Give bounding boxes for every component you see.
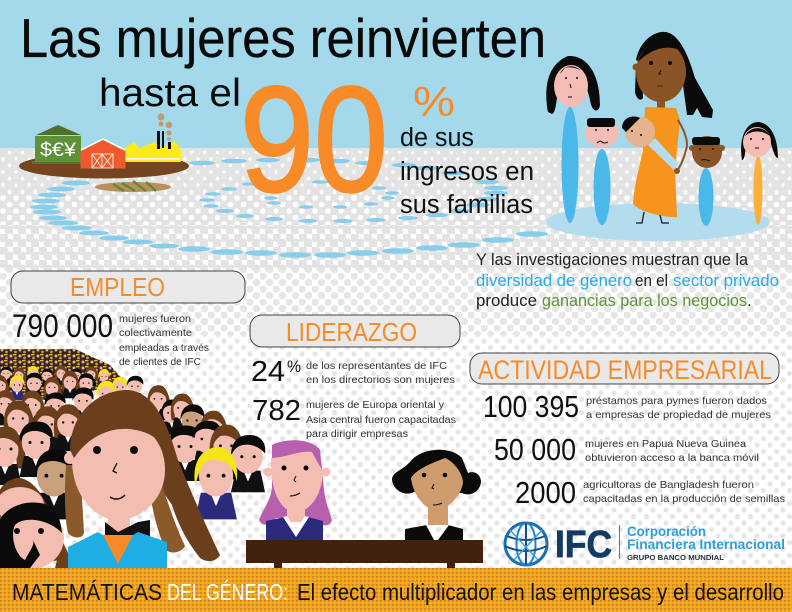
stat description — [306, 399, 456, 440]
heading pill: EMPLEO — [70, 272, 165, 302]
stat description: préstamos para pymes fueron dados — [586, 395, 767, 407]
stat description — [119, 313, 209, 368]
heading pill — [250, 315, 460, 347]
stat description: en los directorios son mujeres — [306, 374, 455, 386]
stat description: para dirigir empresas — [306, 428, 408, 440]
stat description: de los representantes de IFC — [306, 360, 447, 372]
subtitle: de sus ingresos en sus familias — [400, 124, 534, 219]
organisation name — [627, 524, 785, 562]
yellow factory — [123, 114, 181, 162]
illustration: crowd of women — [0, 349, 483, 570]
woman in blue dress — [546, 56, 600, 223]
statement: gender diversity: sector privado — [673, 271, 779, 290]
stat: 782: 782 — [252, 395, 301, 427]
stat description: obtuvieron acceso a la banca móvil — [585, 452, 759, 464]
heading pill — [11, 271, 245, 303]
panel: LIDERAZGO — [250, 315, 460, 440]
statement: gender diversity — [476, 250, 779, 310]
statement: gender diversity: Y las investigaciones muestran que la — [476, 250, 749, 269]
statement: gender diversity: diversidad de género — [476, 271, 632, 290]
background: blue sky — [0, 0, 792, 148]
heading pill: LIDERAZGO — [286, 317, 417, 347]
distant crowd — [0, 349, 125, 400]
stat description: mujeres de Europa oriental y — [306, 399, 445, 411]
stat description: colectivamente — [119, 327, 192, 339]
man with black hair and beard, foreground left — [0, 502, 75, 570]
woman with long brown hair, large foreground — [64, 390, 220, 568]
pink-haired woman — [259, 440, 332, 540]
banner text: DEL GÉNERO: — [167, 579, 288, 605]
globe icon — [505, 523, 547, 565]
stat: 100 395: 100 395 — [483, 389, 579, 424]
panel: EMPLEO — [11, 271, 245, 368]
organisation name: Financiera Internacional — [627, 537, 785, 552]
icon: farm, bank and factory island — [19, 114, 189, 192]
stat description — [306, 360, 455, 386]
organisation name: Corporación — [627, 524, 706, 539]
red barn — [81, 139, 125, 168]
boy with dark skin — [689, 136, 725, 226]
subtitle: de sus ingresos en sus familias: sus familias — [400, 191, 533, 219]
statement: gender diversity: . — [747, 291, 752, 310]
crop field — [95, 181, 171, 192]
mother in orange dress with baby — [622, 32, 713, 223]
stat description: de clientes de IFC — [119, 356, 201, 368]
stat: 50 000: 50 000 — [494, 432, 576, 467]
stat: 24 %: % — [287, 357, 301, 376]
stat description: Asia central fueron capacitadas — [306, 414, 456, 426]
stat: 2000: 2000 — [515, 475, 576, 510]
subtitle: de sus ingresos en sus familias: de sus — [400, 124, 474, 152]
stat description: a empresas de propiedad de mujeres — [586, 409, 771, 421]
footer banner — [0, 568, 792, 612]
organisation name: GRUPO BANCO MUNDIAL — [627, 555, 725, 562]
stat description: empleadas a través — [119, 342, 209, 354]
stat: 790 000: 790 000 — [12, 308, 113, 344]
green bank with currency: $€¥ — [40, 140, 76, 161]
banner text: MATEMÁTICAS — [12, 579, 162, 605]
stat description: mujeres fueron — [119, 313, 191, 325]
statement: gender diversity: produce — [476, 291, 537, 310]
stat description: capacitadas en la producción de semillas — [583, 493, 785, 505]
wooden desk — [246, 540, 483, 569]
girl in orange — [741, 122, 778, 225]
percent sign: % — [413, 78, 455, 125]
pool shadow — [546, 203, 770, 241]
stat: 24 %: 24 — [251, 356, 285, 388]
statement: gender diversity: ganancias para los negocios — [542, 291, 747, 310]
stat description: agricultoras de Bangladesh fueron — [583, 479, 754, 491]
title: Las mujeres reinvierten — [20, 7, 546, 69]
subtitle: de sus ingresos en sus familias: ingresos en — [400, 158, 534, 186]
statement: gender diversity: en el — [635, 271, 668, 290]
woman with black flipped hair — [392, 450, 481, 540]
dark soil island — [19, 154, 189, 178]
stat description — [585, 438, 759, 464]
subtitle: hasta el: hasta el — [99, 72, 241, 115]
big number 90: 90 — [240, 55, 388, 223]
panel: ACTIVIDAD EMPRESARIAL — [470, 353, 785, 510]
crowd rows — [0, 366, 265, 519]
stat description: mujeres en Papua Nueva Guinea — [585, 438, 746, 450]
woman with brown hair, foreground left — [0, 478, 60, 570]
boy in blue — [585, 118, 619, 225]
blue stepping-stone spiral path — [30, 158, 548, 258]
IFC letters: IFC — [555, 524, 612, 566]
green bank with currency — [32, 125, 82, 164]
stat: 24 % — [251, 356, 301, 388]
stat description — [583, 479, 785, 505]
banner text — [12, 579, 784, 605]
stat description — [586, 395, 771, 421]
illustration: family on pool — [546, 32, 778, 241]
logo: IFC — [505, 523, 785, 566]
